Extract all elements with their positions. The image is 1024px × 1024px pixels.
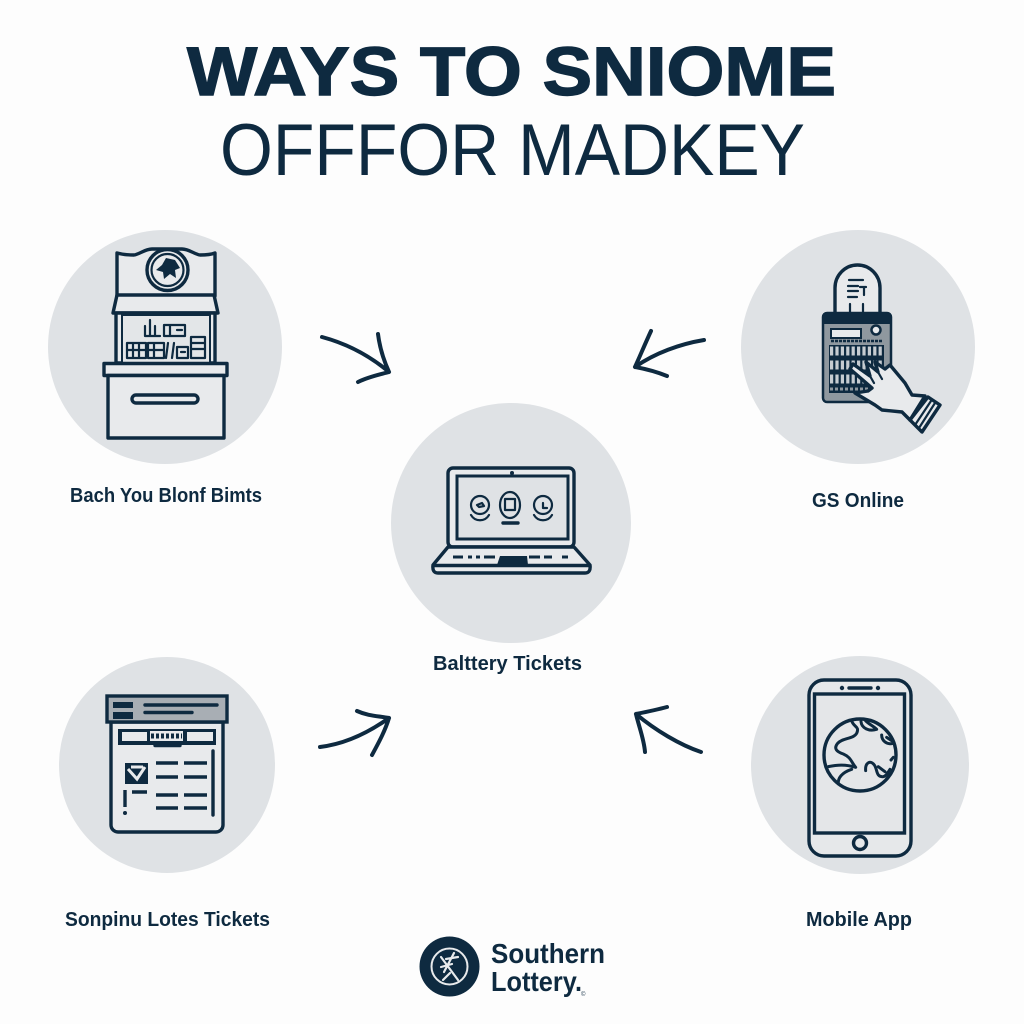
panel: subscription form	[59, 657, 275, 873]
icon: web form	[107, 696, 227, 832]
circle background	[741, 230, 975, 464]
logo: Southern Lottery: Lottery.	[491, 966, 582, 997]
icon: smartphone with globe	[809, 680, 911, 856]
icon: store kiosk	[104, 249, 227, 438]
panel: retail store	[48, 230, 282, 464]
label: center: Balttery Tickets	[433, 652, 582, 675]
title line 2: OFFFOR MADKEY	[220, 110, 805, 191]
icon: ticket printer and hand	[823, 265, 940, 432]
label: top left: Bach You Blonf Bimts	[70, 484, 262, 507]
circle background	[59, 657, 275, 873]
arrow: bottom right	[636, 707, 701, 752]
title	[187, 33, 836, 191]
label: top right: GS Online	[812, 489, 904, 512]
arrow: top left	[322, 334, 389, 382]
logo wordmark: Southern	[491, 938, 605, 969]
circle background	[751, 656, 969, 874]
panel: terminal	[741, 230, 975, 464]
arrow: bottom left	[320, 711, 389, 755]
logo: Southern Lottery: ©	[581, 991, 586, 998]
icon: laptop	[433, 468, 590, 573]
logo: Southern Lottery	[420, 936, 605, 998]
panel: mobile app	[751, 656, 969, 874]
label: bottom right: Mobile App	[806, 908, 912, 931]
arrow: top right	[635, 331, 704, 376]
circle background	[48, 230, 282, 464]
title line 1: WAYS TO SNIOME	[187, 33, 836, 110]
panel: online laptop	[391, 403, 631, 643]
icon: screen symbols	[471, 492, 552, 523]
logo mark	[420, 936, 480, 996]
label: bottom left: Sonpinu Lotes Tickets	[65, 908, 270, 931]
circle background	[391, 403, 631, 643]
